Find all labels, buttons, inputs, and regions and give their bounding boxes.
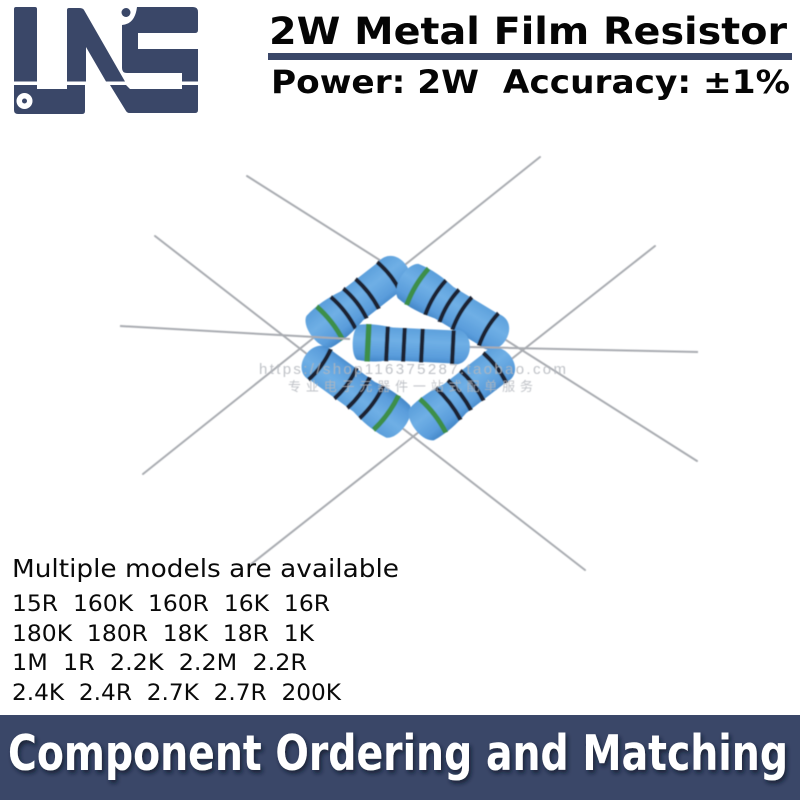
- models list: Multiple models are available: [12, 554, 399, 583]
- resistor: bottom right: [402, 339, 523, 446]
- watermark: [259, 361, 566, 394]
- watermark: 专业电子元器件一站式配单服务: [288, 379, 533, 394]
- models list: 1M 1R 2.2K 2.2M 2.2R: [12, 651, 307, 676]
- title divider bar: [268, 53, 792, 60]
- resistor: center: [352, 323, 471, 366]
- center wires: [120, 326, 698, 352]
- watermark: https://shop116375287.taobao.com: [259, 361, 566, 378]
- specs: power and accuracy: Power: 2W Accuracy: ±1%: [271, 63, 790, 101]
- resistor: bottom left: [293, 337, 417, 444]
- footer band: [0, 715, 800, 800]
- photo: resistors: [120, 157, 698, 570]
- models list: 15R 160K 160R 16K 16R: [12, 592, 330, 617]
- resistor: top right: [390, 259, 517, 358]
- models list: [12, 554, 399, 706]
- resistor: top left: [299, 247, 419, 354]
- models list: 2.4K 2.4R 2.7K 2.7R 200K: [12, 681, 342, 706]
- logo: LNS: [14, 7, 198, 114]
- models list: 180K 180R 18K 18R 1K: [12, 622, 315, 647]
- title: 2W Metal Film Resistor: [269, 10, 788, 53]
- wires: [143, 157, 697, 570]
